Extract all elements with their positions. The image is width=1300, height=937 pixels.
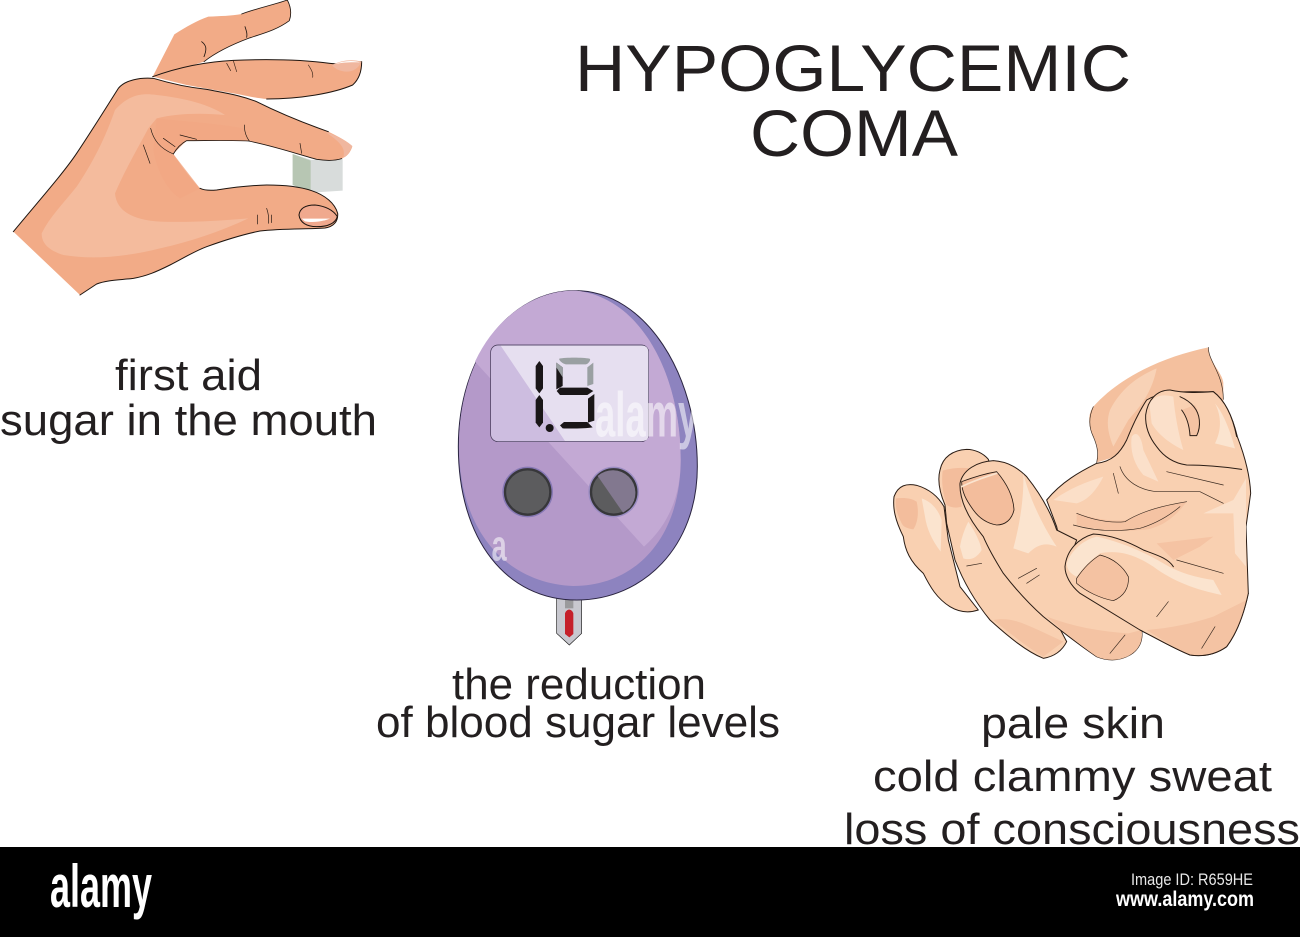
text: symptoms: pale skin [981, 699, 1165, 748]
text: blood sugar: the reduction [452, 660, 706, 709]
watermark on meter [492, 381, 698, 571]
illustration: pale clammy hand [894, 347, 1251, 660]
top finger curl [1073, 390, 1242, 531]
text: symptoms: loss of consciousness [844, 805, 1300, 854]
website: www.alamy.com [1115, 888, 1254, 911]
meter body [458, 291, 697, 600]
back finger outline [202, 0, 291, 62]
title: COMA [750, 96, 958, 170]
text: first aid: first aid [115, 351, 262, 400]
reading 1.9 [536, 358, 594, 432]
illustration: hand holding sugar cube [13, 0, 362, 295]
title: HYPOGLYCEMIC [575, 31, 1131, 105]
footer bar [0, 847, 1300, 937]
illustration: glucose meter [458, 291, 698, 645]
thumb nail [299, 205, 337, 227]
face sheen [475, 291, 681, 547]
meter face [459, 291, 681, 586]
watermark on meter: a [492, 523, 507, 571]
middle finger outline and nail [153, 60, 362, 99]
left button [502, 467, 553, 517]
text: first aid: sugar in the mouth [0, 396, 377, 445]
hand highlight [42, 94, 248, 257]
sugar cube [293, 154, 343, 193]
index finger [960, 461, 1142, 660]
text: symptoms [844, 699, 1300, 854]
image id: Image ID: R659HE [1131, 870, 1253, 889]
text: symptoms: cold clammy sweat [873, 752, 1272, 801]
ring finger [939, 449, 1067, 658]
right button [588, 467, 639, 517]
wrist [1089, 347, 1223, 463]
index fingernail [325, 132, 352, 157]
main hand and thumb [13, 78, 352, 295]
alamy logo: alamy [50, 853, 152, 920]
palm and back of hand [1047, 392, 1251, 656]
thumb [1065, 534, 1248, 656]
watermark on meter: alamy [595, 381, 698, 451]
back finger [153, 0, 291, 77]
middle finger [153, 60, 362, 99]
hand outline and creases [13, 78, 342, 295]
text: first aid [0, 351, 377, 445]
text: blood sugar: of blood sugar levels [376, 698, 780, 747]
pinky [894, 485, 978, 612]
title [575, 31, 1131, 170]
screen [491, 345, 649, 442]
palm shading and highlights [1053, 434, 1247, 656]
test strip [557, 583, 582, 645]
text: blood sugar [376, 660, 780, 747]
hand shadow [153, 118, 248, 198]
